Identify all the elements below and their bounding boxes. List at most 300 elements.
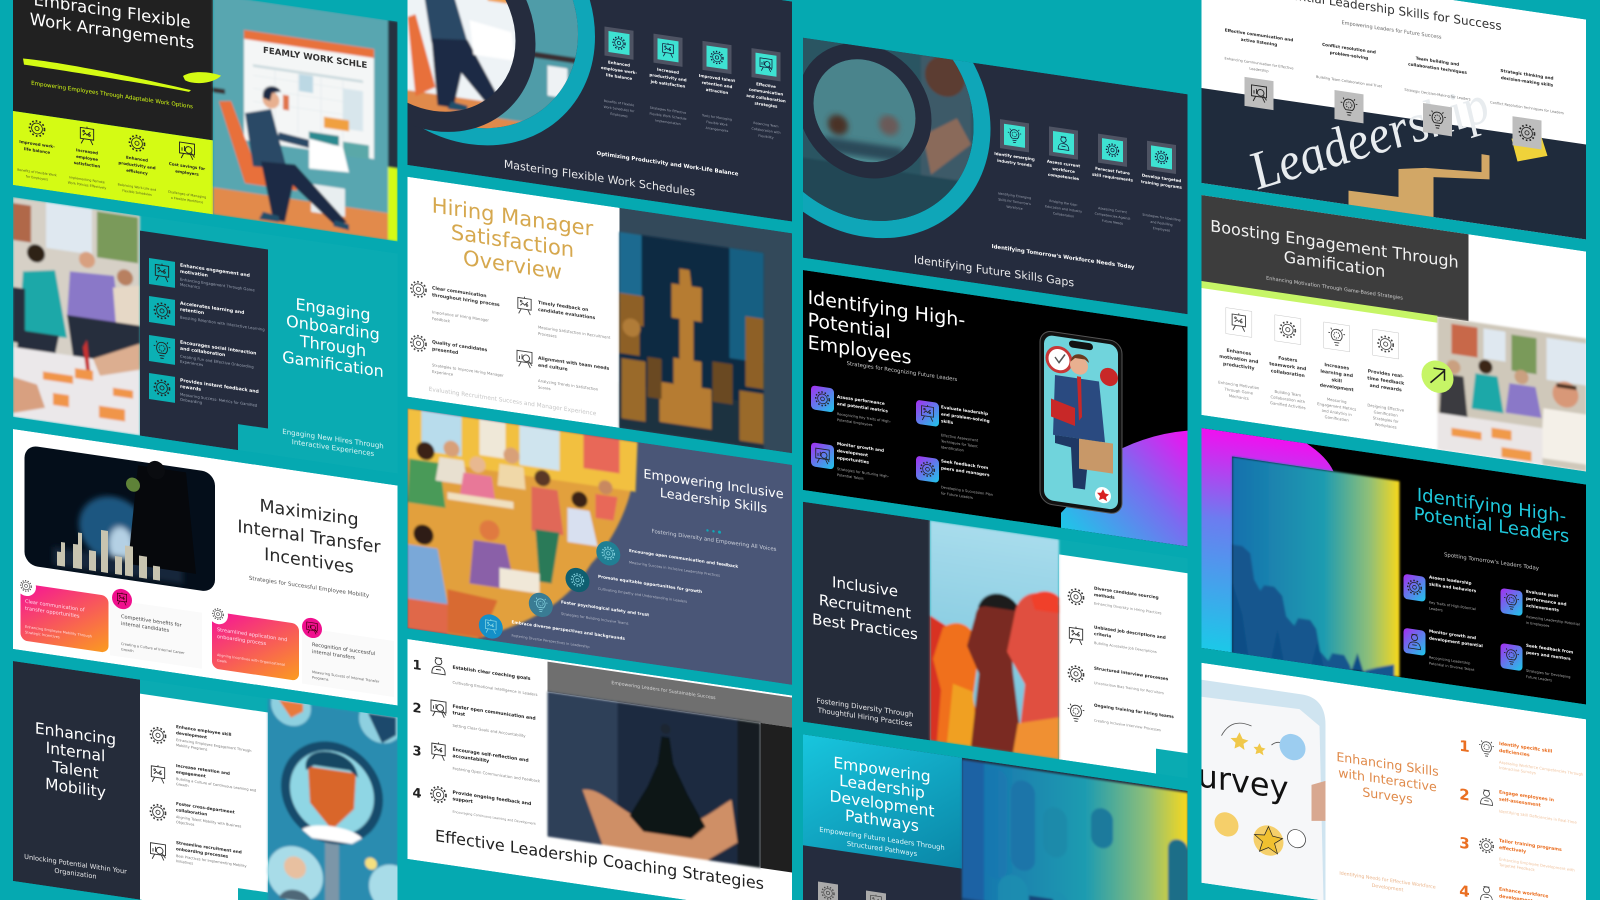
title: Gamification [1284, 247, 1385, 281]
numbered list: Enhancing Employee Development with [1499, 856, 1575, 873]
numbered list: Targeted Feedback [1498, 862, 1536, 872]
list: Quality of candidates [432, 340, 487, 353]
feature text: Collaboration [1053, 211, 1074, 219]
benefits text: employers [175, 168, 199, 177]
title: Enhancing Skills [1336, 749, 1439, 779]
list: criteria [1094, 631, 1111, 639]
numbered list: Identifying Skill Deficiencies in Real-Time [1499, 808, 1577, 825]
numbered list: Engage employees in [1499, 790, 1554, 804]
list text [512, 531, 738, 671]
subtitle: Structured Pathways [847, 840, 918, 858]
title: Potential Leaders [1414, 504, 1569, 548]
benefit rows: Onboarding [180, 397, 203, 405]
subtitle: Empowering Leaders for Future Success [1341, 20, 1442, 41]
feature text: time feedback [1367, 375, 1405, 387]
numbered list: 2 [1459, 785, 1470, 805]
title: Potential [808, 308, 891, 343]
yellow band [13, 111, 213, 214]
title: Best Practices [812, 610, 918, 644]
subtitle: Strategies for Successful Employee Mobility [249, 576, 370, 599]
card text [25, 599, 380, 689]
feature text: attraction [706, 87, 728, 95]
skill columns: Strategic thinking and [1500, 68, 1554, 81]
feature text: Fosters [1278, 356, 1297, 364]
list: Increase retention and [176, 763, 230, 776]
list text: skills and behaviors [1429, 581, 1477, 593]
list: Streamline recruitment and [176, 840, 242, 855]
card text: Measuring Success of Internal Transfer [312, 670, 379, 684]
band caption: Empowering Leaders for Sustainable Success [611, 680, 716, 701]
title: Leadership Skills [660, 486, 767, 517]
card text: Strategic Incentives [25, 630, 60, 639]
feature text: Education and Industry [1045, 204, 1082, 214]
benefits text: Improved work- [19, 139, 55, 149]
skill columns: active listening [1241, 37, 1277, 47]
panel: Hiring Manager Satisfaction Overview [408, 177, 792, 453]
numbered list: deficiencies [1499, 748, 1530, 758]
list [150, 720, 256, 875]
feature text: Flexible Work [706, 120, 728, 127]
panel: Essential Leadership Skills for Success [1202, 0, 1586, 249]
list text: and problem-solving [941, 411, 990, 423]
gradient icons [811, 384, 939, 485]
feature text: Strategies for Upskilling [1142, 213, 1181, 222]
illustration: diverse classroom [408, 408, 638, 662]
list text [1429, 574, 1580, 688]
benefits text [17, 139, 206, 205]
feature text: training programs [1141, 179, 1183, 190]
feature text: Effective [756, 81, 776, 89]
feature text: Strategies for [1373, 415, 1399, 424]
feature text: Increased [657, 67, 679, 75]
title: Identifying High- [808, 286, 965, 332]
panel: Empowering Leadership Development Pathways [803, 734, 1188, 900]
benefit rows: Enhancing Engagement Through Game [180, 277, 255, 293]
list text: Strategies for Building Inclusive Teams [561, 612, 629, 626]
card text: Programs [312, 675, 329, 682]
title: Internal [46, 739, 105, 766]
list text: Potential Employees [837, 418, 873, 427]
numbered list: effectively [1499, 845, 1526, 855]
skill columns: collaboration techniques [1408, 61, 1467, 75]
dark inner ring [806, 43, 924, 178]
title: with Interactive [1338, 765, 1437, 794]
title: Through [299, 331, 366, 360]
card text: Creating a Culture of Internal Career [121, 642, 185, 655]
numbered list: Encouraging Continuous Learning and Development [452, 810, 537, 826]
slide background [803, 502, 1188, 778]
feature text: Identify emerging [994, 151, 1035, 162]
feature text: and collaboration [746, 93, 786, 104]
card text: Streamlined application and [217, 627, 287, 643]
footer line: Evaluating Recruitment Success and Manager Experience [429, 387, 597, 417]
list: and culture [538, 362, 568, 373]
list text: Embrace diverse perspectives and backgrounds [512, 619, 625, 641]
panel: Identifying High-Potential Employees [803, 270, 1188, 547]
list text: Recognizing Key Traits of High- [837, 412, 891, 424]
feature text: and rewards [1370, 383, 1402, 393]
benefit rows: Experiences [180, 359, 203, 367]
list: Initiatives [176, 859, 193, 866]
list text [837, 389, 993, 503]
title: Mastering Flexible Work Schedules [504, 158, 695, 199]
benefits text: productivity and [118, 160, 156, 170]
feature text: motivation and [1219, 354, 1258, 365]
list: Growth [176, 782, 189, 788]
list: Unbiased job descriptions and [1094, 624, 1166, 640]
title: Surveys [1362, 784, 1413, 807]
subtitle: Thoughtful Hiring Practices [817, 705, 913, 728]
list: Creating Inclusive Interview Processes [1094, 718, 1161, 732]
list text: Assess leadership [1429, 574, 1472, 586]
dots [706, 529, 721, 534]
list: Best Practices for Implementing Mobility [176, 854, 247, 868]
feature text: Through Game [1224, 386, 1254, 396]
feature text: Gamification [1325, 414, 1349, 423]
photo: team at table [13, 197, 140, 436]
list text: achievements [1526, 603, 1559, 613]
slide background [1202, 195, 1586, 472]
feature text: Mechanics [1229, 393, 1249, 401]
title: Incentives [264, 545, 354, 578]
benefit rows: Enhances engagement and [180, 264, 250, 279]
silhouette artwork [1232, 457, 1400, 717]
feature text: Designing Effective [1367, 402, 1404, 413]
card text: Competitive benefits for [121, 614, 182, 629]
circular photo: leader pointing [753, 0, 983, 244]
numbered list: 2 [412, 701, 422, 717]
gradient frame [1202, 428, 1334, 667]
benefit rows: motivation [180, 269, 208, 279]
slide background [803, 270, 1188, 547]
title: Development [830, 786, 934, 821]
footer note: Identifying Needs for Effective Workforce [1339, 871, 1436, 891]
list: development [176, 730, 207, 740]
benefit rows: Measuring Success: Metrics for Gamified [180, 392, 257, 408]
title: Satisfaction [451, 219, 574, 262]
numbered list: 4 [412, 786, 422, 802]
panel: Enhancing Internal Talent Mobility [13, 661, 398, 900]
panel: Empowering Inclusive Leadership Skills [408, 408, 792, 685]
benefits text: Enhanced [126, 155, 148, 163]
white content area [408, 177, 620, 428]
list text: opportunities [837, 455, 870, 465]
feature text: Measuring [1327, 396, 1347, 404]
numbered list [1459, 735, 1584, 900]
feature text: Collaboration with [751, 127, 781, 135]
slide background [408, 0, 792, 222]
numbered list: 3 [412, 744, 422, 760]
feature text [994, 151, 1183, 234]
numbered list: Encourage self-reflection and [452, 748, 529, 764]
feature text: job satisfaction [650, 79, 686, 89]
feature text: strategies [755, 101, 778, 109]
feature icon tiles [1000, 119, 1176, 174]
benefits text: Cost savings for [169, 161, 205, 171]
subtitle: Fostering Diversity and Empowering All Voices [652, 529, 777, 553]
list: Importance of Hiring Manager [432, 309, 489, 323]
feature text [601, 58, 786, 142]
card text: Growth [121, 647, 134, 653]
list: Processes [538, 331, 557, 339]
subtitle: Engaging New Hires Through [282, 427, 384, 450]
feature text: competencies [1048, 172, 1080, 181]
card text: Goals [217, 659, 227, 664]
benefits text: Benefits of Flexible Work [17, 168, 57, 177]
list: Enhancing Diversity in Hiring Practices [1094, 601, 1162, 615]
slide background [13, 429, 398, 706]
panel: Enhancing Skills with Interactive Surveys [1177, 659, 1586, 900]
list: Scores [538, 384, 551, 391]
feature text: Strategies for Effective [650, 106, 686, 115]
list: Measuring Satisfaction in Recruitment [538, 324, 610, 340]
list text: peers and mentors [1526, 650, 1571, 661]
list [411, 280, 611, 400]
grey band [548, 662, 792, 728]
numbered list: 3 [1459, 834, 1470, 853]
feature text: Assessing Current [1098, 206, 1127, 214]
header block [13, 0, 213, 140]
list: Ongoing training for hiring teams [1094, 702, 1174, 719]
list text: development potential [1429, 635, 1483, 648]
slide background [13, 661, 398, 900]
tagline: Identifying Tomorrow's Workforce Needs Today [992, 244, 1135, 271]
grey icon tiles [1244, 77, 1542, 149]
numbered list: Enhance workforce [1499, 887, 1548, 900]
icons [818, 882, 886, 900]
panel: Boosting Engagement Through Gamification [1202, 195, 1586, 472]
dark strip [760, 723, 792, 873]
slide background [1202, 663, 1586, 900]
white list panel [1059, 554, 1188, 778]
panel: Identifying Future Skills Gaps [747, 0, 1188, 314]
phone illustration [1040, 330, 1122, 515]
list text: for Future Leaders [941, 491, 973, 500]
benefits text: Flexible Schedules [122, 189, 152, 197]
skill columns: Leadership [1249, 67, 1269, 73]
gradient artwork [962, 760, 1188, 900]
panel: Engaging Onboarding Through Gamification [13, 197, 398, 474]
list text: Promote equitable opportunities for growth [598, 574, 702, 594]
list: throughout hiring process [432, 292, 500, 308]
title: Recruitment [819, 591, 911, 623]
slide background [1202, 0, 1586, 240]
feature text: Enhancing Motivation [1218, 379, 1259, 390]
numbered list: Establish clear coaching goals [452, 665, 531, 682]
list: Strategies to Improve Hiring Manager [432, 362, 504, 378]
title: Hiring Manager [432, 192, 593, 241]
skill columns: decision-making skills [1501, 75, 1554, 88]
subtitle: Fostering Diversity Through [817, 696, 913, 719]
skill columns: Conflict Resolution Techniques for Leaders [1490, 100, 1564, 115]
feature text: learning and [1320, 368, 1353, 379]
numbered list: Interactive Surveys [1499, 765, 1536, 775]
feature text: Develop targeted [1142, 173, 1181, 183]
gradient title block [803, 734, 962, 869]
list text: Future Leaders [1526, 675, 1552, 683]
panel: Effective Leadership Coaching Strategies [408, 639, 792, 900]
feature text: workforce [1052, 166, 1075, 174]
calendar heading: FEAMLY WORK SCHLE [263, 46, 367, 71]
numbered list: trust [452, 710, 466, 718]
benefit rows: rewards [180, 384, 201, 393]
benefits text: Balancing Work-Life and [118, 182, 156, 192]
feature text: Identifying Emerging [998, 191, 1031, 200]
skill columns: problem-solving [1330, 50, 1368, 60]
feature text: industry trends [997, 158, 1033, 168]
benefit rows: Creating Fun and Effective Onboarding [180, 354, 254, 369]
feature text: Collaboration with [1271, 394, 1306, 404]
subtitle: Spotting Tomorrow's Leaders Today [1444, 552, 1540, 572]
feature text: development [1320, 382, 1354, 393]
benefits text: for Employers [26, 174, 48, 182]
list: engagement [176, 769, 206, 779]
card text: Aligning Incentives with Organizational [217, 653, 285, 667]
inner disc with employee [338, 0, 538, 149]
slide background [13, 197, 398, 474]
gradient corner [1061, 412, 1188, 547]
list: collaboration [176, 807, 207, 817]
photo: wooden figures [620, 232, 764, 449]
list text: Evaluate leadership [941, 404, 988, 416]
benefits text: Challenges of Managing [168, 190, 206, 199]
title: Pathways [845, 806, 919, 835]
feature text: Improved talent [699, 73, 735, 83]
title: Effective Leadership Coaching Strategies [435, 826, 764, 893]
footer note: Development [1372, 883, 1403, 893]
title: Leadership [839, 771, 925, 802]
feature icon tiles [604, 26, 780, 81]
list: Enhancing Employee Engagement Through [176, 738, 251, 753]
list: Unconscious Bias Training for Recruiters [1094, 681, 1164, 695]
card text: Enhancing Employee Mobility Through [25, 625, 92, 639]
numbered list: accountability [452, 753, 489, 764]
card text: transfer opportunities [25, 606, 80, 620]
list: Enhance employee skill [176, 724, 231, 737]
feature text: and Analytics in [1322, 408, 1352, 417]
feature text: Implementation [655, 118, 681, 126]
numbered list: Tailor training programs [1499, 839, 1562, 853]
title: Talent [51, 758, 99, 783]
slide background [408, 639, 792, 900]
gradient card 3 [212, 611, 299, 681]
skill columns [1225, 27, 1564, 117]
photo: businessman over city [24, 442, 215, 593]
feature text: Forecast future [1095, 166, 1130, 176]
illustration: employee at calendar [213, 0, 398, 242]
feature text: Gamification [1374, 409, 1398, 418]
list text: Effective Assessment [941, 433, 978, 443]
numbered list: Fostering Open Communication and Feedback [452, 766, 541, 784]
feature text: skill [1331, 377, 1342, 385]
subtitle: Strategies for Recognizing Future Leaders [847, 361, 958, 383]
plain card 4 [302, 627, 394, 697]
arrow badge [1422, 358, 1454, 395]
list: methods [1094, 592, 1115, 600]
benefits text: Increased [76, 147, 98, 155]
teal ring [747, 0, 982, 246]
title: Empowering Inclusive [643, 467, 784, 503]
slide background [803, 38, 1188, 314]
card text: Recognition of successful [312, 642, 375, 657]
title: Gamification [282, 347, 384, 381]
gradient card 1 [20, 583, 108, 653]
skill columns: Team building and [1416, 56, 1459, 67]
feature text: Assess current [1047, 159, 1080, 168]
tagline: Optimizing Productivity and Work-Life Balance [597, 151, 739, 178]
title: Overview [463, 245, 562, 284]
illustration: magnifier over people [266, 698, 398, 900]
feature text: Building Team [1274, 389, 1301, 398]
list text: Fostering Diverse Perspectives in Leadership [512, 634, 590, 649]
dark inner ring [342, 0, 526, 134]
title: Inclusive [832, 573, 898, 601]
feature text: Balancing Team [753, 121, 779, 129]
benefit rows: Boosting Retention with Interactive Learning [180, 315, 265, 332]
feature text: collaboration [1271, 368, 1305, 379]
panel: Maximizing Internal Transfer Incentives [13, 429, 398, 706]
panel: Identifying High-Potential Leaders [1202, 428, 1586, 745]
list: Alignment with team needs [538, 356, 609, 372]
title: Empowering [833, 753, 931, 786]
numbered list: 1 [412, 658, 422, 674]
photo: survey sheet [1177, 676, 1326, 900]
benefits text: employee [76, 154, 98, 162]
feature text: Provides real- [1368, 369, 1404, 380]
icon tiles [1226, 308, 1399, 359]
list text: Assessing Leadership Potential [1526, 615, 1580, 627]
benefits text: satisfaction [74, 160, 100, 169]
dark header [1202, 195, 1468, 321]
list: Timely feedback on [538, 301, 588, 313]
list text: Measuring Success in Inclusive Leadership Practices [629, 560, 720, 578]
photo: sculpted profiles [930, 520, 1059, 759]
list text: peers and managers [941, 465, 990, 477]
list text: Strategies for Developing [1526, 669, 1570, 679]
feature text: and Reskilling [1150, 220, 1173, 227]
feature text: Gamified Activities [1270, 400, 1306, 410]
feature text: Tools for Managing [702, 113, 732, 122]
feature text: skill requirements [1092, 172, 1134, 183]
feature text: Engagement Metrics [1317, 401, 1356, 412]
numbered list: self-assessment [1499, 796, 1541, 809]
list text: Encourage open communication and feedback [629, 548, 738, 569]
list text: performance and [1526, 596, 1567, 607]
list: Diverse candidate sourcing [1094, 585, 1159, 600]
gradient icons [1404, 574, 1522, 671]
slide background [803, 734, 1188, 900]
plain card 2 [110, 599, 202, 669]
list text: Identification [941, 445, 964, 453]
photo: hands holding figures [548, 692, 760, 868]
benefits text: Implementing Remote [69, 175, 105, 184]
title: Boosting Engagement Through [1210, 216, 1459, 272]
photo: team workshop [1438, 317, 1586, 472]
panel: Inclusive Recruitment Best Practices [803, 502, 1188, 778]
card text: internal candidates [121, 621, 169, 634]
list text: Developing a Succession Plan [941, 485, 993, 497]
feature text: Flexible Work Schedule [649, 112, 687, 121]
title: Identifying High- [1417, 485, 1566, 528]
dark list panel [140, 231, 268, 454]
skill columns: Strategic Decision-Making for Leaders [1404, 88, 1471, 102]
list text: Foster psychological safety and trust [561, 599, 649, 617]
numbered list: Provide ongoing feedback and [452, 791, 531, 807]
benefits text: efficiency [126, 168, 148, 176]
feature text: productivity and [649, 72, 687, 83]
dark title column [13, 661, 140, 900]
panel: Mastering Flexible Work Schedules [408, 0, 792, 222]
